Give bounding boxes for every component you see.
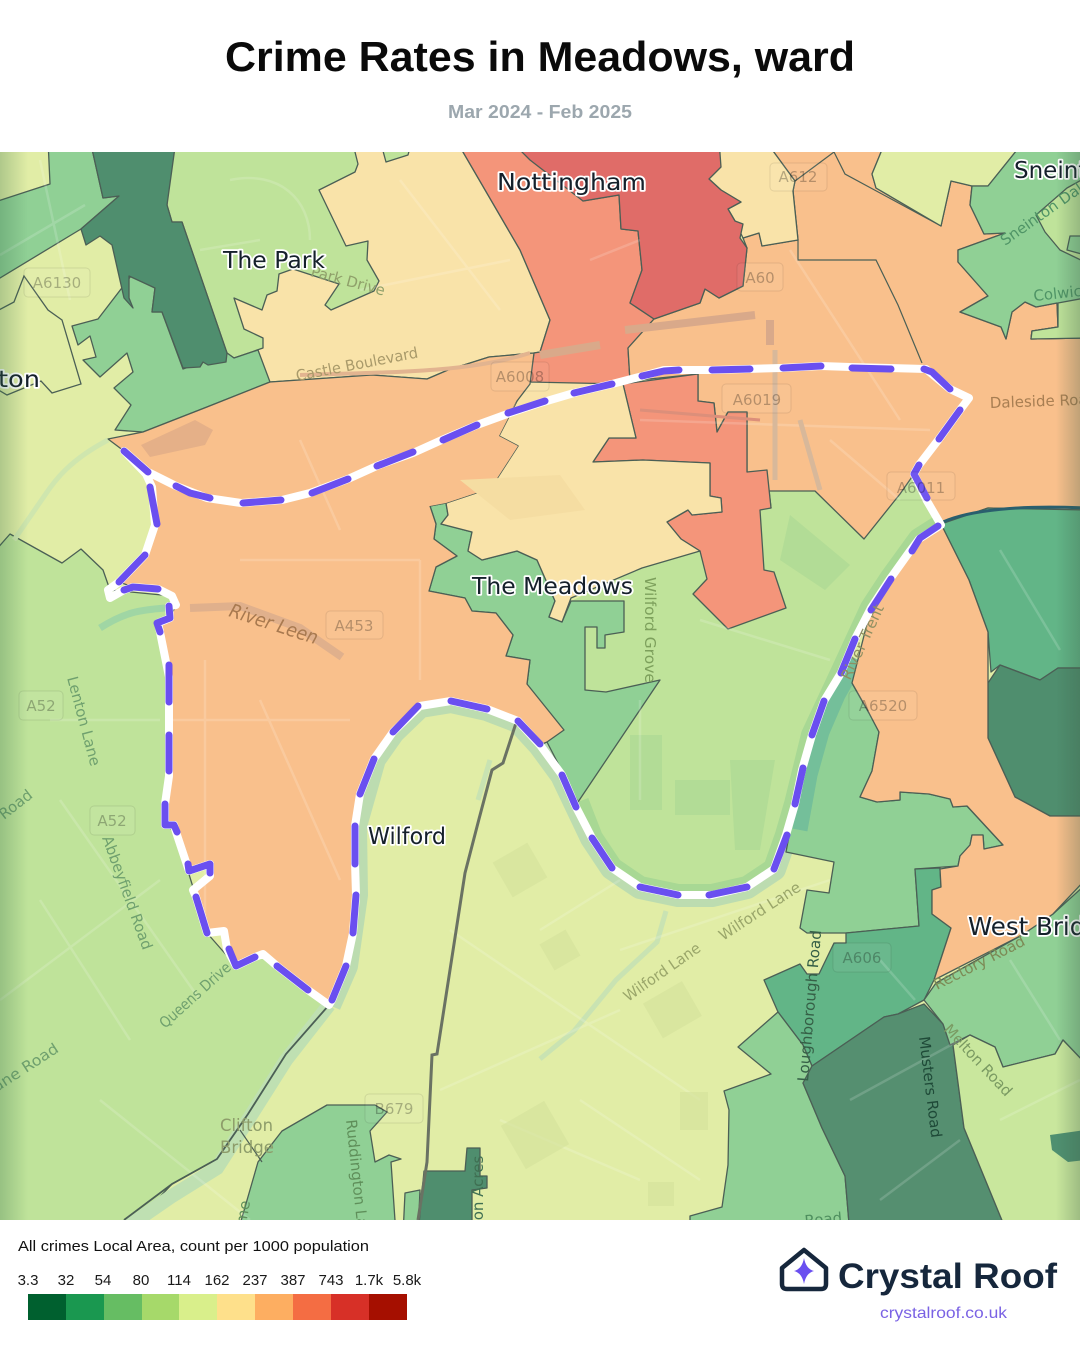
area: west large orange bbox=[108, 353, 564, 1005]
legend values: 54 bbox=[95, 1272, 111, 1289]
place labels: The Park bbox=[222, 248, 326, 274]
place labels: Nottingham bbox=[497, 170, 646, 196]
area: Sneinton light green patch north bbox=[1036, 178, 1080, 262]
area: NE orange bbox=[628, 140, 1080, 539]
area: Park pale yellow bbox=[234, 140, 550, 382]
ward boundary: white line bbox=[108, 366, 969, 1005]
area: Nottingham salmon bbox=[456, 140, 654, 384]
edge shading bbox=[0, 152, 1080, 1220]
area: Clifton dark green bbox=[420, 1147, 488, 1220]
area: east medium green Sneinton bbox=[958, 140, 1080, 339]
river bank: south-west bbox=[130, 1005, 329, 1225]
area: east medium green bbox=[924, 885, 1080, 1067]
west river bbox=[100, 608, 165, 628]
legend values: 114 bbox=[167, 1272, 191, 1289]
road labels: Rectory Road bbox=[931, 932, 1028, 994]
road shields: A52 bbox=[26, 697, 56, 715]
road labels: River Leen bbox=[226, 600, 321, 649]
road shields: A6019 bbox=[733, 391, 781, 409]
road labels: Lenton Lane bbox=[63, 674, 104, 768]
area: south-east light green bbox=[953, 1035, 1080, 1235]
area: lens inside north boundary bbox=[148, 401, 518, 530]
west ward boundary lines bbox=[0, 276, 81, 395]
area: river east mid green bbox=[941, 508, 1080, 680]
website url: crystalroof.co.uk bbox=[880, 1305, 1008, 1322]
area: top pale yellow bbox=[710, 152, 799, 247]
Clifton side road line bbox=[240, 1130, 262, 1162]
legend values bbox=[18, 1272, 422, 1289]
road labels: Castle Boulevard bbox=[294, 344, 419, 385]
legend values: 1.7k bbox=[355, 1272, 384, 1289]
road shields: A6520 bbox=[859, 697, 907, 715]
area: Meadows central salmon bbox=[593, 374, 786, 629]
logo wordmark: Crystal Roof bbox=[838, 1257, 1057, 1296]
building patches south of the river bbox=[493, 843, 708, 1206]
road labels: Loughborough Road bbox=[794, 929, 825, 1082]
area: SE medium green bbox=[786, 673, 1003, 933]
area: east dark green bbox=[988, 665, 1080, 816]
place labels: Wilford bbox=[368, 824, 446, 850]
area: west light green bbox=[0, 534, 329, 1235]
river banks: south side bbox=[329, 701, 795, 1005]
legend values: 32 bbox=[58, 1272, 74, 1289]
legend values: 743 bbox=[318, 1272, 344, 1289]
road shields: A453 bbox=[335, 617, 373, 635]
river teal band on east bank bbox=[800, 660, 858, 830]
road labels: Melton Road bbox=[940, 1020, 1016, 1100]
area: Ruddington mid green bbox=[240, 1104, 402, 1220]
road labels: Abbeyfield Road bbox=[98, 833, 156, 952]
area: SE orange bbox=[852, 524, 1080, 980]
road shields: B679 bbox=[375, 1100, 413, 1118]
road labels: Wilford Lane bbox=[715, 878, 804, 944]
south-west boundary line bbox=[124, 1005, 329, 1220]
road shields: A52 bbox=[97, 812, 127, 830]
road shields: A6008 bbox=[496, 368, 544, 386]
road labels: Clifton Acres bbox=[469, 1156, 487, 1250]
road labels: Road bbox=[804, 1209, 843, 1230]
road labels: River Trent bbox=[837, 602, 888, 683]
road labels: Clifton bbox=[220, 1116, 273, 1136]
area: A606 mid green bbox=[764, 868, 951, 1066]
area: south-central dark green bbox=[803, 1004, 1008, 1235]
area: inner river loop light green bbox=[571, 474, 941, 895]
legend values: 80 bbox=[133, 1272, 149, 1289]
road shields bbox=[19, 163, 955, 1123]
area: NW medium band bbox=[0, 152, 117, 279]
area: NE pale green bbox=[871, 152, 1014, 227]
legend values: 237 bbox=[242, 1272, 268, 1289]
legend values: 387 bbox=[280, 1272, 306, 1289]
road labels: Queens Drive bbox=[156, 958, 235, 1032]
area: Meadows pale yellow bbox=[441, 382, 722, 622]
buildings and railway bands bbox=[141, 315, 820, 657]
area: Sneinton light green patch south bbox=[1031, 298, 1080, 339]
fields in the river loop bbox=[630, 515, 850, 850]
road labels: Ruddington Lane bbox=[342, 1119, 373, 1247]
title: Crime Rates in Meadows, ward bbox=[225, 33, 855, 80]
area: Meadows mid green bbox=[429, 503, 660, 802]
area: red city centre bbox=[521, 152, 748, 320]
subtitle: date range: Mar 2024 - Feb 2025 bbox=[448, 102, 632, 122]
road labels: Park Drive bbox=[309, 262, 387, 300]
area: dark green arboretum bbox=[81, 140, 227, 368]
area: The Park light green bbox=[167, 140, 379, 358]
Trent river dark line bbox=[943, 507, 1080, 522]
road shields: A606 bbox=[843, 949, 881, 967]
road shields: A6011 bbox=[897, 479, 945, 497]
legend values: 162 bbox=[204, 1272, 230, 1289]
small green patch at top bbox=[382, 152, 410, 163]
road shields: A60 bbox=[745, 269, 775, 287]
place labels: The Meadows bbox=[471, 574, 633, 600]
ward boundary: purple dashes bbox=[119, 366, 960, 1000]
internal ward lines in north-east bbox=[795, 152, 941, 363]
railway line bbox=[418, 720, 517, 1220]
road labels: Musters Road bbox=[915, 1035, 945, 1139]
legend values: 5.8k bbox=[393, 1272, 422, 1289]
legend title: All crimes Local Area, count per 1000 population bbox=[18, 1238, 369, 1255]
place labels bbox=[0, 158, 1080, 941]
legend values: 3.3 bbox=[18, 1272, 38, 1289]
small dark patch bbox=[1050, 1130, 1080, 1162]
road shields: A6130 bbox=[33, 274, 81, 292]
road shields: A612 bbox=[779, 168, 817, 186]
road labels: Bridge bbox=[220, 1138, 274, 1158]
streets texture bbox=[0, 160, 1080, 1220]
legend colour scale bbox=[28, 1294, 407, 1320]
road labels: Wilford Grove bbox=[641, 577, 659, 683]
stream south of the river bbox=[478, 760, 666, 1059]
road labels bbox=[0, 174, 1080, 1250]
area: south medium green bbox=[690, 1012, 850, 1235]
north-west pale river bbox=[14, 440, 108, 540]
road labels: Wilford Lane bbox=[620, 939, 704, 1005]
road labels: me bbox=[232, 1199, 254, 1226]
inner river band bbox=[578, 525, 941, 895]
area: Lenton medium green bbox=[72, 276, 270, 432]
icon: crystal roof house logo bbox=[782, 1250, 826, 1289]
small green piece bbox=[403, 1189, 421, 1220]
